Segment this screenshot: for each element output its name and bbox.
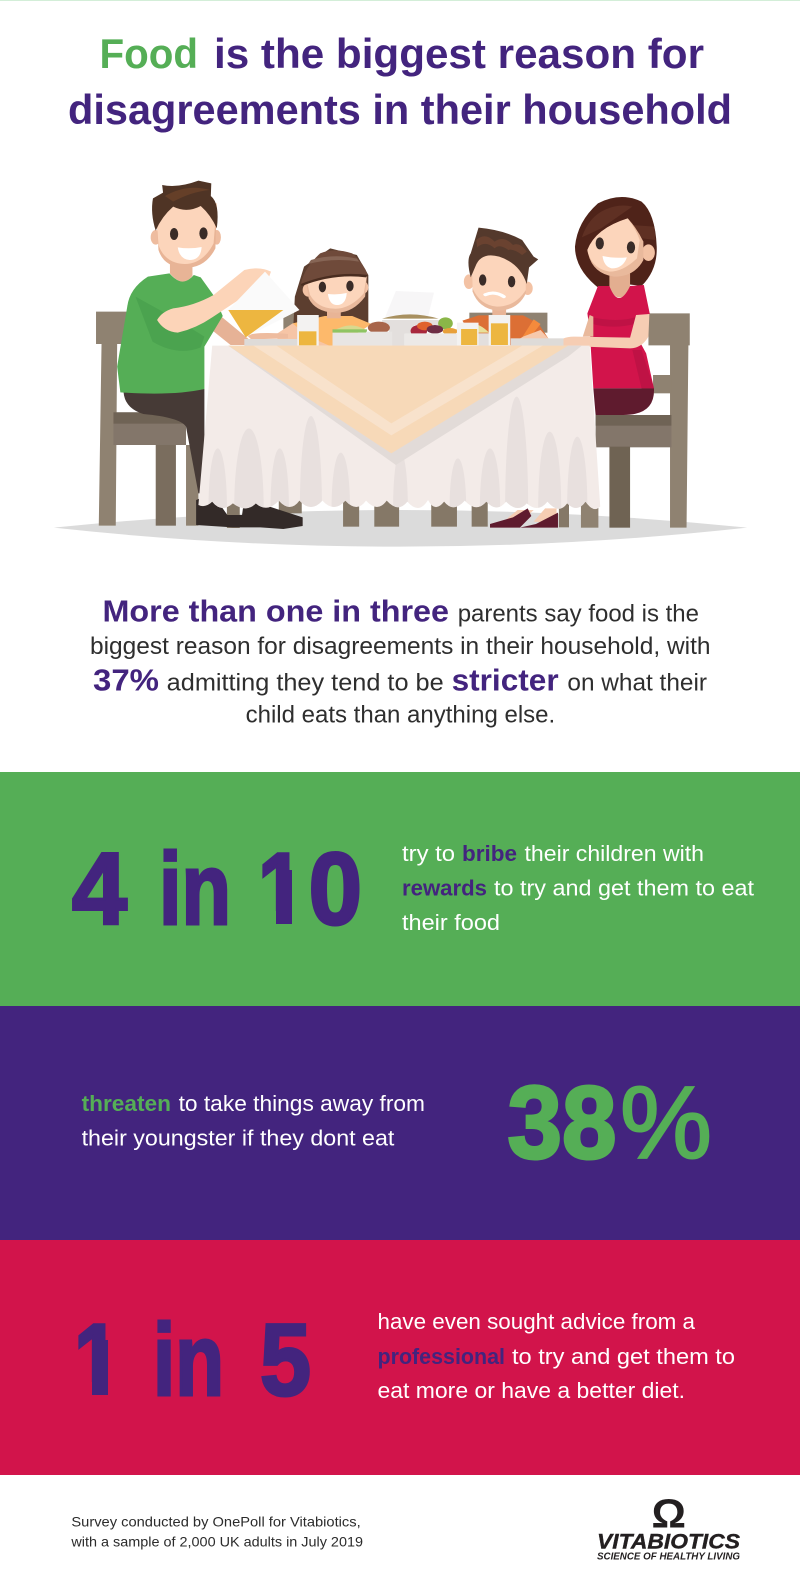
- tablecloth: [198, 346, 600, 510]
- text: bribe: to try and get them to eat: [494, 876, 754, 901]
- mother's arms: [583, 315, 593, 337]
- survey source note: [70, 1514, 363, 1550]
- intro paragraph: on what their: [567, 670, 707, 697]
- neck: [170, 260, 192, 282]
- far arm: [208, 317, 256, 345]
- logo: Vitabiotics: VITABIOTICS: [597, 1529, 741, 1553]
- diamond cloth shadow: [228, 346, 582, 465]
- small bowl: [368, 322, 390, 334]
- jug in father's hand: [228, 272, 299, 337]
- text: professional: eat more or have a better diet.: [378, 1378, 685, 1403]
- yellow dome: [452, 323, 489, 333]
- intro paragraph: parents say food is the: [458, 601, 699, 628]
- near arm pouring: [157, 268, 271, 333]
- big stat: 1 in 5: [60, 1303, 311, 1417]
- text: professional: have even sought advice from a: [378, 1309, 696, 1334]
- big stat: 4 in 10: 1: [258, 832, 303, 946]
- title: disagreements in their household: [68, 86, 732, 133]
- panel: 1 in 5: [0, 1240, 800, 1475]
- mother's neck: [609, 273, 630, 297]
- text: professional: [378, 1309, 735, 1403]
- survey source note: Survey conducted by OnePoll for Vitabiotics,: [71, 1514, 361, 1530]
- right chair: [581, 313, 690, 528]
- mother's dress: [587, 285, 650, 340]
- girl's arm: [276, 323, 329, 346]
- text: bribe: rewards: [402, 876, 487, 901]
- text: threaten: to take things away from: [179, 1091, 425, 1116]
- mother's hair: [575, 197, 657, 289]
- panel: 38%: [0, 1006, 800, 1240]
- water pitcher: [385, 291, 434, 317]
- girl: [247, 248, 372, 346]
- diamond cloth: [228, 346, 568, 453]
- father's shoes: [196, 497, 303, 529]
- plates: [244, 339, 297, 346]
- mother's shoes: [490, 508, 558, 528]
- big stat: 4 in 10: in: [159, 832, 231, 946]
- big stat: 4 in 10: [72, 832, 362, 946]
- girl's top: [293, 316, 372, 346]
- table food and dishes: [228, 272, 563, 346]
- father's trousers: [124, 389, 204, 493]
- mother: [490, 197, 657, 528]
- children's chair backs: [283, 312, 547, 333]
- fruit: [411, 317, 457, 337]
- mother's skirt: [593, 388, 654, 415]
- left chair: [96, 312, 198, 526]
- fruit plate: [404, 333, 463, 346]
- panel: 4 in 10: [0, 772, 800, 1006]
- cloth folds: [208, 397, 588, 509]
- text: bribe: their food: [402, 910, 500, 935]
- text: bribe: their children with: [524, 841, 704, 866]
- salad bowl: [334, 325, 367, 331]
- intro paragraph: More than one in three: [102, 594, 449, 629]
- text: bribe: bribe: [462, 841, 517, 866]
- face: [156, 203, 217, 268]
- middle glass: [457, 323, 479, 346]
- hair: [152, 181, 218, 231]
- big stat: 1 in 5: 1: [74, 1303, 119, 1417]
- big stat: 4 in 10: 4: [72, 832, 127, 946]
- father's shirt: [117, 273, 223, 394]
- intro paragraph: biggest reason for disagreements in their household, with: [90, 633, 710, 660]
- intro paragraph: [90, 594, 710, 729]
- mouth: [178, 247, 202, 260]
- big stat: 4 in 10: 0: [309, 832, 362, 946]
- intro paragraph: stricter: [452, 663, 559, 698]
- title: Food: [100, 30, 198, 77]
- mother's face: [642, 244, 655, 261]
- title: [68, 30, 732, 133]
- text: threaten: threaten: [82, 1091, 171, 1116]
- intro paragraph: child eats than anything else.: [246, 702, 555, 729]
- logo: Vitabiotics: SCIENCE OF HEALTHY LIVING: [597, 1551, 740, 1562]
- intro paragraph: admitting they tend to be: [167, 670, 444, 697]
- centre dish: [382, 320, 440, 346]
- survey source note: with a sample of 2,000 UK adults in July 2019: [70, 1534, 363, 1550]
- left glass: [297, 315, 319, 346]
- big stat: 38%: [508, 1065, 712, 1180]
- text: bribe: try to: [402, 841, 455, 866]
- title: is the biggest reason for: [214, 30, 704, 77]
- big stat: 38%: %: [620, 1065, 712, 1180]
- text: threaten: [82, 1091, 425, 1151]
- logo: Vitabiotics: [597, 1491, 741, 1562]
- intro paragraph: 37%: [93, 663, 159, 698]
- big stat: 1 in 5: in: [153, 1303, 224, 1417]
- illustration: family at dinner table: [54, 180, 746, 547]
- eyes: [170, 228, 178, 240]
- big stat: 1 in 5: 5: [260, 1303, 311, 1417]
- text: threaten: their youngster if they dont eat: [82, 1126, 394, 1151]
- ears: [151, 230, 161, 245]
- boy: [462, 228, 548, 346]
- table legs and chair legs under table: [227, 497, 569, 528]
- right glass: [489, 315, 510, 346]
- text: bribe: [402, 841, 754, 935]
- text: professional: to try and get them to: [512, 1344, 735, 1369]
- logo: Vitabiotics: Ω: [652, 1491, 686, 1537]
- big stat: 38%: 38: [508, 1065, 616, 1180]
- boy's shirt: [462, 315, 548, 346]
- father: [117, 181, 303, 529]
- text: professional: professional: [378, 1344, 505, 1369]
- ground shadow: [54, 510, 747, 547]
